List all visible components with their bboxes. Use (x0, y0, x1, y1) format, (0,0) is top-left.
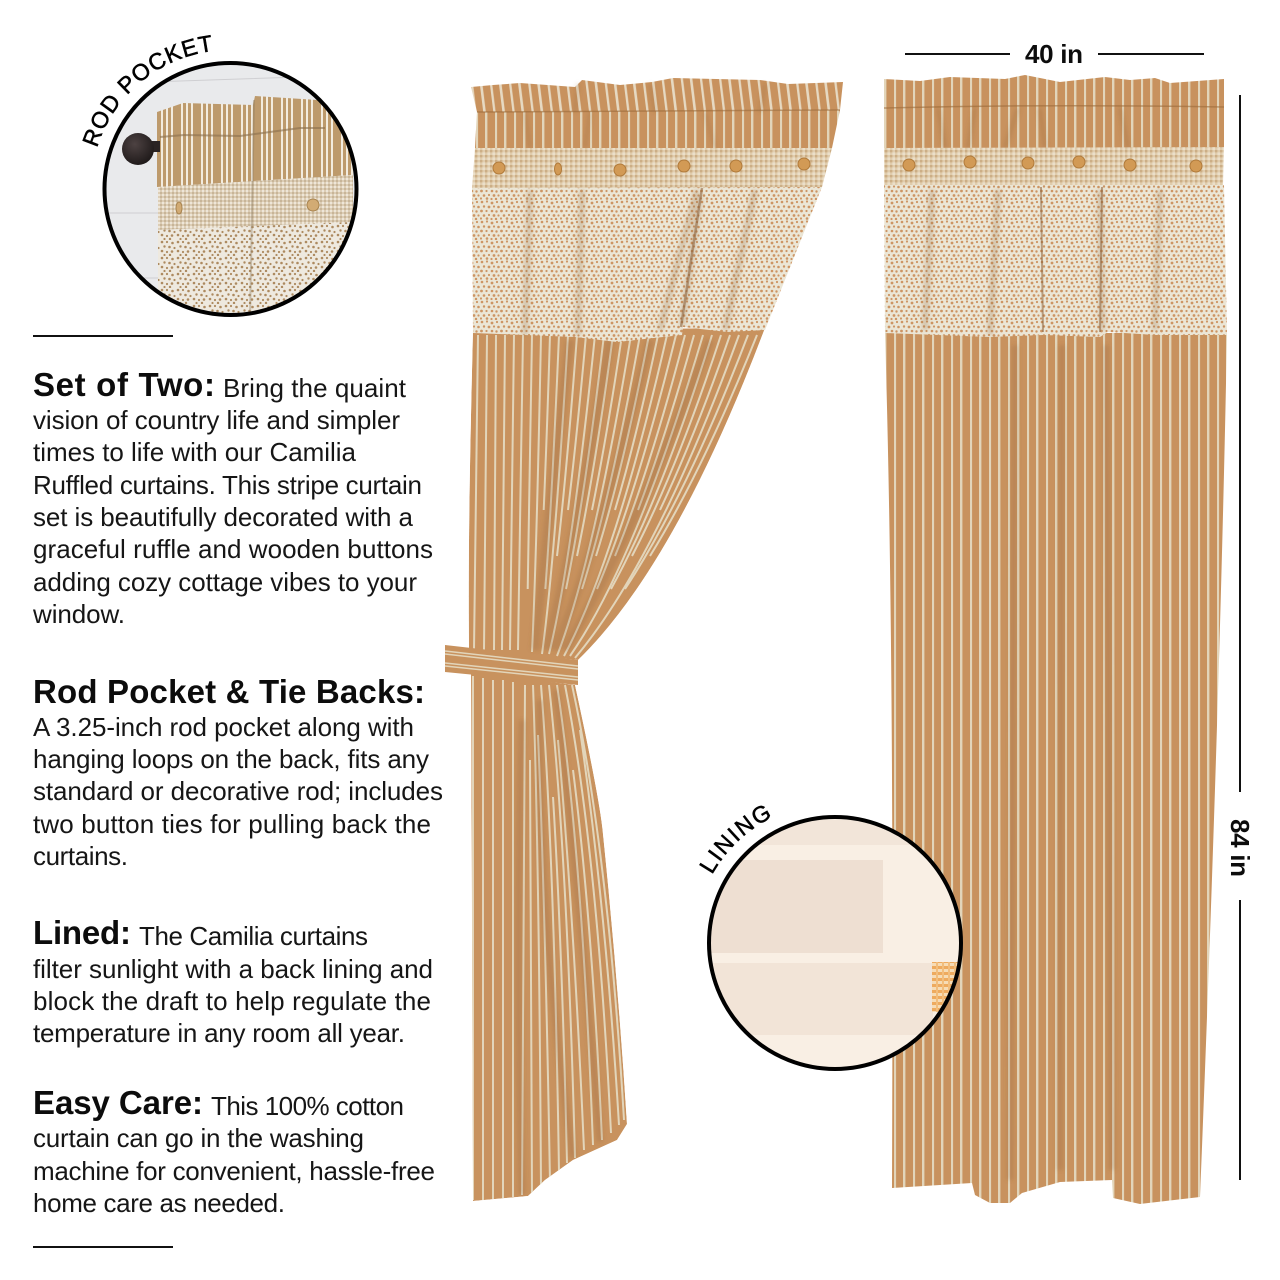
circle outline (104, 63, 356, 315)
heading: rod pocket and tie backs: Rod Pocket & Tie Backs: (33, 673, 425, 710)
dimension: height 84 in: 84 in (1225, 819, 1255, 877)
body: set of two: window. (32, 599, 125, 629)
body: set of two: vision of country life and simpler (33, 405, 400, 435)
body: set of two: times to life with our Camilia (33, 437, 357, 467)
text block: lined (33, 914, 433, 1048)
text block: rod pocket and tie backs (33, 673, 443, 871)
body: rod pocket and tie backs: curtains. (33, 841, 128, 871)
body: rod pocket and tie backs: A 3.25-inch rod pocket along with (33, 712, 414, 742)
photo: curtain tied back (445, 78, 843, 1201)
inset circle: lining (705, 812, 965, 1074)
buttons right curtain (903, 156, 1202, 172)
gingham band (884, 146, 1224, 185)
heading: easy care: Easy Care: (33, 1084, 203, 1121)
floral ruffle (884, 185, 1227, 337)
tied curtain upper panel gathered (469, 328, 765, 660)
striped band and rod pocket (471, 78, 843, 148)
body: set of two: adding cozy cottage vibes to your (33, 567, 417, 597)
body: easy care: home care as needed. (33, 1188, 285, 1218)
lower striped panel (885, 333, 1227, 1204)
body: easy care: curtain can go in the washing (33, 1123, 364, 1153)
floral ruffle (472, 187, 822, 342)
photo: curtain hanging flat (884, 75, 1227, 1204)
body: set of two: graceful ruffle and wooden buttons (33, 534, 433, 564)
inset circle: rod pocket (100, 60, 362, 320)
body: set of two (32, 373, 433, 629)
tie back band (445, 645, 578, 685)
bottom rule (33, 1246, 173, 1248)
body: easy care (33, 1091, 435, 1218)
body: set of two: Ruffled curtains. This stripe curtain (33, 470, 422, 500)
curtain rod finial (122, 133, 160, 165)
body: rod pocket and tie backs: hanging loops on the back, fits any (33, 744, 429, 774)
text block: set of two (32, 366, 433, 629)
dimension: width 40 in: 40 in (1025, 39, 1083, 69)
gingham band (472, 148, 832, 188)
body: lined: block the draft to help regulate the (33, 986, 431, 1016)
circle outline (709, 817, 961, 1069)
body: easy care: This 100% cotton (211, 1091, 404, 1121)
body: lined (33, 921, 433, 1048)
text block: easy care (33, 1084, 435, 1218)
body: rod pocket and tie backs (33, 712, 443, 871)
curtain detail (157, 96, 353, 320)
striped band and rod pocket (884, 75, 1224, 148)
curved label: lining: LINING (699, 806, 770, 874)
wooden buttons (176, 199, 319, 214)
body: lined: temperature in any room all year. (33, 1018, 405, 1048)
tied curtain lower panel below tie back (471, 672, 627, 1201)
wall background (106, 65, 354, 290)
top rule (33, 335, 173, 337)
body: rod pocket and tie backs: standard or decorative rod; includes (33, 776, 443, 806)
body: lined: The Camilia curtains (139, 921, 368, 951)
heading: lined: Lined: (33, 914, 131, 951)
body: lined: filter sunlight with a back lining and (33, 954, 433, 984)
body: set of two: set is beautifully decorated with a (33, 502, 414, 532)
heading: set of two: Set of Two: (33, 366, 215, 403)
body: rod pocket and tie backs: two button ties for pulling back the (33, 809, 431, 839)
buttons left curtain (493, 158, 810, 176)
curved label: rod pocket: ROD POCKET (82, 34, 211, 147)
orange gingham corner (932, 962, 960, 1012)
body: easy care: machine for convenient, hassle-free (33, 1156, 435, 1186)
body: set of two: Bring the quaint (223, 373, 407, 403)
